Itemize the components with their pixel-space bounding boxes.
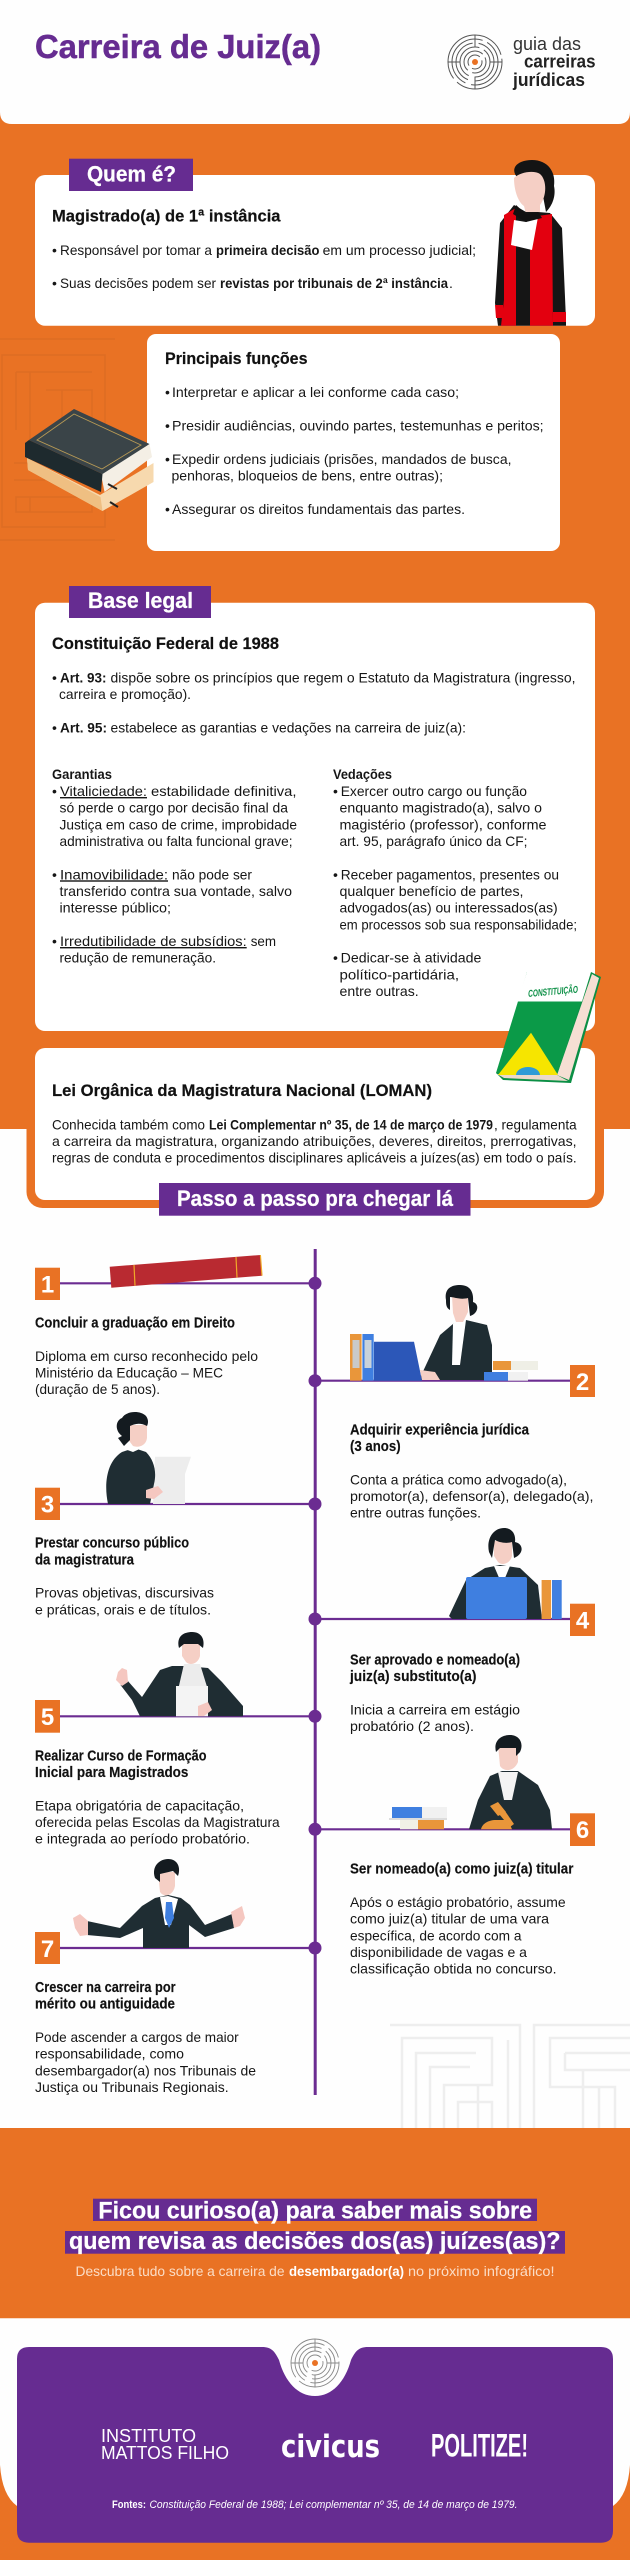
text: responsabilidade, como xyxy=(35,2046,184,2062)
orange upper background xyxy=(0,0,630,1208)
heading: juiz(a) substituto(a) xyxy=(349,1669,477,1685)
subheading: Descubra tudo sobre a carreira de xyxy=(76,2263,285,2279)
text: e práticas, orais e de títulos. xyxy=(35,1601,211,1617)
logo: maze mark xyxy=(291,2339,339,2387)
panel: call to action xyxy=(0,2128,630,2560)
bullet: art. 93: dispõe sobre os princípios que regem o Estatuto da Magistratura (ingresso, xyxy=(110,670,576,686)
heading: Crescer na carreira por xyxy=(35,1980,176,1996)
bullet: primeira decisão: primeira decisão xyxy=(216,242,320,258)
step 6 xyxy=(350,1735,595,1977)
list of functions: Expedir ordens judiciais (prisões, mandados de busca, xyxy=(172,451,512,467)
heading: magistrado: Magistrado(a) de 1ª instância xyxy=(52,207,281,226)
bullet: revistas por tribunais xyxy=(52,275,453,291)
heading: Ser aprovado e nomeado(a) xyxy=(350,1652,520,1668)
column: vedações: • xyxy=(333,783,338,799)
list of functions: • xyxy=(165,451,170,467)
number 1 xyxy=(35,1268,60,1300)
text: Diploma em curso reconhecido pelo xyxy=(35,1348,258,1364)
bullet: revistas por tribunais: revistas por tribunais de 2ª instância xyxy=(220,275,448,291)
text: Provas objetivas, discursivas xyxy=(35,1585,214,1601)
text: Etapa obrigatória de capacitação, xyxy=(35,1797,244,1813)
text xyxy=(35,1797,280,1847)
logo: guia das carreiras jurídicas xyxy=(448,34,596,90)
tag: base legal xyxy=(69,586,211,618)
illustration: constitution book xyxy=(496,972,601,1083)
column: vedações: entre outras. xyxy=(340,983,419,999)
text: LOMAN description: , regulamenta xyxy=(494,1116,577,1132)
number 5 xyxy=(35,1700,60,1733)
column: garantias: não pode ser xyxy=(172,866,252,882)
title: Carreira de Juiz(a) xyxy=(35,28,321,65)
heading: mérito ou antiguidade xyxy=(35,1997,175,2013)
column: vedações: qualquer benefício de partes, xyxy=(340,883,524,899)
illustration: stacked law books xyxy=(25,409,154,511)
text: LOMAN description: Lei Complementar nº 35, de 14 de março de 1979 xyxy=(209,1116,493,1132)
list of functions xyxy=(165,384,544,517)
text: Inicia a carreira em estágio xyxy=(350,1701,520,1717)
bullet: primeira decisão: • xyxy=(52,242,57,258)
text: LOMAN description xyxy=(52,1116,577,1166)
column: garantias: administrativa ou falta funcional grave; xyxy=(60,833,292,849)
heading: Inicial para Magistrados xyxy=(35,1765,188,1781)
column: vedações: em processos sob sua responsabilidade; xyxy=(340,916,577,932)
column: garantias: • xyxy=(52,866,57,882)
number 1: 1 xyxy=(41,1272,54,1298)
number 3: 3 xyxy=(41,1492,54,1518)
step 7 xyxy=(35,1859,256,2095)
maze pattern: gray background xyxy=(390,2025,630,2128)
column: garantias: interesse público; xyxy=(60,900,171,916)
column: garantias: • xyxy=(52,783,57,799)
heading xyxy=(35,1536,189,1568)
heading xyxy=(349,1652,520,1685)
step 5 xyxy=(35,1632,280,1847)
heading: da magistratura xyxy=(35,1552,135,1568)
logo: politize: POLITIZE! xyxy=(431,2428,528,2464)
sources: Fontes: xyxy=(112,2499,146,2511)
number 4: 4 xyxy=(576,1608,590,1634)
column: vedações: advogados(as) ou interessados(as) xyxy=(340,900,558,916)
illustration: constitution book: CONSTITUIÇÃO xyxy=(528,983,578,1000)
column: garantias: Inamovibilidade: xyxy=(60,866,168,882)
bullet: art. 95: estabelece as garantias e vedações na carreira de juiz(a): xyxy=(110,720,466,736)
maze pattern: orange background xyxy=(0,339,115,540)
heading: passo a passo: Passo a passo pra chegar lá xyxy=(177,1186,454,1211)
logo: guia das carreiras jurídicas: guia das xyxy=(513,34,581,54)
list of functions: Interpretar e aplicar a lei conforme cada caso; xyxy=(172,384,459,400)
step 1 xyxy=(35,1255,262,1397)
list of functions: • xyxy=(165,501,170,517)
step 2 xyxy=(350,1285,595,1521)
heading: Adquirir experiência jurídica xyxy=(350,1422,530,1438)
column: vedações: • xyxy=(333,950,338,966)
column: vedações: Receber pagamentos, presentes ou xyxy=(341,866,559,882)
illustration: woman with blue laptop xyxy=(449,1528,562,1619)
panel: footer credits xyxy=(17,2339,613,2543)
column: garantias: • xyxy=(52,933,57,949)
panel: principais funções xyxy=(147,334,560,551)
text: LOMAN description: regras de conduta e procedimentos disciplinares aplicáveis a juízes(as) em todo o país. xyxy=(52,1150,577,1166)
column: garantias: redução de remuneração. xyxy=(60,950,216,966)
bullet: art. 93: carreira e promoção). xyxy=(59,686,191,702)
illustration: woman with document xyxy=(106,1412,191,1504)
icon: diploma scroll xyxy=(110,1255,262,1288)
column: garantias: Justiça em caso de crime, improbidade xyxy=(60,816,297,832)
text: promotor(a), defensor(a), delegado(a), xyxy=(350,1488,594,1504)
text: Após o estágio probatório, assume xyxy=(350,1894,566,1910)
text: probatório (2 anos). xyxy=(350,1718,474,1734)
number 4 xyxy=(570,1604,595,1636)
column: garantias: transferido contra sua vontade, salvo xyxy=(60,883,292,899)
bullet: art. 93: Art. 93: xyxy=(60,670,106,686)
heading: Prestar concurso público xyxy=(35,1536,189,1552)
number 5: 5 xyxy=(41,1704,54,1731)
heading xyxy=(350,1422,530,1455)
bullet: primeira decisão: Responsável por tomar a xyxy=(60,242,212,258)
heading: Concluir a graduação em Direito xyxy=(35,1316,235,1332)
heading: Ser nomeado(a) como juiz(a) titular xyxy=(350,1862,574,1878)
headline line 2: quem revisa as decisões dos(as) juízes(as)? xyxy=(69,2228,560,2255)
text: Ministério da Educação – MEC xyxy=(35,1365,223,1381)
tag: quem é: Quem é? xyxy=(87,162,176,187)
subheading xyxy=(76,2263,554,2279)
text: LOMAN description: Conhecida também como xyxy=(52,1116,205,1132)
number 7: 7 xyxy=(41,1936,54,1963)
list of functions: • xyxy=(165,384,170,400)
text: oferecida pelas Escolas da Magistratura xyxy=(35,1814,280,1830)
text: Pode ascender a cargos de maior xyxy=(35,2029,239,2045)
subheading: desembargador(a) xyxy=(289,2263,404,2279)
column: garantias: Irredutibilidade de subsídios: xyxy=(60,933,247,949)
panel: LOMAN xyxy=(35,1048,595,1200)
logo: instituto mattos filho xyxy=(101,2426,229,2463)
step 4 xyxy=(349,1528,595,1734)
text: LOMAN description: a carreira da magistratura, organizando atribuições, deveres, direitos, prerrogativas, xyxy=(52,1133,577,1149)
logo: instituto mattos filho: MATTOS FILHO xyxy=(101,2443,229,2463)
heading xyxy=(35,1980,176,2013)
column: garantias: estabilidade definitiva, xyxy=(151,783,296,799)
heading: LOMAN: Lei Orgânica da Magistratura Nacional (LOMAN) xyxy=(52,1081,432,1100)
number 3 xyxy=(35,1488,60,1520)
logo: civicus: civicus xyxy=(281,2429,380,2465)
heading: principais funções: Principais funções xyxy=(165,349,308,368)
column: vedações: magistério (professor), conforme xyxy=(340,816,547,832)
text xyxy=(35,1348,258,1397)
bullet: primeira decisão xyxy=(52,242,476,258)
bullet: revistas por tribunais: Suas decisões podem ser xyxy=(60,275,216,291)
bullet: primeira decisão: em um processo judicial; xyxy=(323,242,476,258)
text: desembargador(a) nos Tribunais de xyxy=(35,2062,256,2078)
column: vedações: Vedações xyxy=(333,766,392,782)
column: vedações: político-partidária, xyxy=(340,966,459,982)
heading: (3 anos) xyxy=(350,1439,401,1455)
text: (duração de 5 anos). xyxy=(35,1381,160,1397)
logo: instituto mattos filho: INSTITUTO xyxy=(101,2426,196,2446)
list of functions: Presidir audiências, ouvindo partes, testemunhas e peritos; xyxy=(172,418,544,434)
number 6 xyxy=(570,1813,595,1846)
number 2 xyxy=(570,1365,595,1397)
logo: guia das carreiras jurídicas: carreiras xyxy=(524,52,596,72)
text: como juiz(a) titular de uma vara xyxy=(350,1911,549,1927)
text xyxy=(350,1701,520,1734)
number 6: 6 xyxy=(576,1817,589,1844)
text xyxy=(350,1471,594,1521)
column: vedações: enquanto magistrado(a), salvo o xyxy=(340,800,542,816)
text: disponibilidade de vagas e a xyxy=(350,1944,527,1960)
footer white background xyxy=(0,2318,630,2530)
logo: guia das carreiras jurídicas: jurídicas xyxy=(512,70,585,90)
bullet: art. 95: Art. 95: xyxy=(60,720,107,736)
column: garantias: Garantias xyxy=(52,766,112,782)
heading: Realizar Curso de Formação xyxy=(35,1748,207,1764)
illustration: man in robe with paper xyxy=(116,1632,243,1716)
text: Conta a prática como advogado(a), xyxy=(350,1471,567,1487)
column: garantias: Vitaliciedade: xyxy=(60,783,147,799)
column: vedações: • xyxy=(333,866,338,882)
text: entre outras funções. xyxy=(350,1505,481,1521)
step 3 xyxy=(35,1412,214,1617)
text: e integrada ao período probatório. xyxy=(35,1831,250,1847)
column: vedações: Dedicar-se à atividade xyxy=(341,950,482,966)
column: vedações: Exercer outro cargo ou função xyxy=(341,783,527,799)
text: Justiça ou Tribunais Regionais. xyxy=(35,2079,229,2095)
list of functions: • xyxy=(165,418,170,434)
tag: base legal: Base legal xyxy=(88,588,193,613)
text xyxy=(350,1894,566,1977)
heading: constituição: Constituição Federal de 1988 xyxy=(52,634,279,653)
subheading: no próximo infográfico! xyxy=(408,2263,554,2279)
headline line 1: Ficou curioso(a) para saber mais sobre xyxy=(98,2198,532,2225)
panel: base legal xyxy=(35,586,595,1031)
column: vedações xyxy=(333,766,577,999)
heading xyxy=(35,1748,207,1781)
list of functions: penhoras, bloqueios de bens, entre outras); xyxy=(172,468,443,484)
text: específica, de acordo com a xyxy=(350,1927,522,1943)
illustration: judge woman in robe xyxy=(495,160,566,326)
text: classificação obtida no concurso. xyxy=(350,1961,556,1977)
timeline: vertical line and connectors xyxy=(60,1249,570,2095)
column: garantias: sem xyxy=(251,933,276,949)
illustration: man in suit with open arms xyxy=(73,1859,245,1948)
number 7 xyxy=(35,1932,60,1964)
list of functions: Assegurar os direitos fundamentais das partes. xyxy=(172,501,465,517)
bullet: revistas por tribunais: • xyxy=(52,275,57,291)
tag: quem é xyxy=(69,159,193,191)
bullet: art. 93: • xyxy=(52,670,57,686)
bullet: revistas por tribunais: . xyxy=(449,275,453,291)
column: garantias xyxy=(52,766,297,966)
column: garantias: só perde o cargo por decisão final da xyxy=(60,800,288,816)
text xyxy=(35,2029,256,2095)
sources: Constituição Federal de 1988; Lei complementar nº 35, de 14 de março de 1979. xyxy=(150,2499,518,2511)
text xyxy=(35,1585,214,1617)
illustration: woman at laptop xyxy=(350,1285,538,1381)
number 2: 2 xyxy=(576,1369,589,1396)
column: vedações: art. 95, parágrafo único da CF; xyxy=(340,833,528,849)
bullet: art. 95: • xyxy=(52,720,57,736)
illustration: judge with gavel and books xyxy=(389,1735,552,1829)
panel: quem é xyxy=(35,159,595,326)
bullet: art. 93 xyxy=(52,670,576,702)
